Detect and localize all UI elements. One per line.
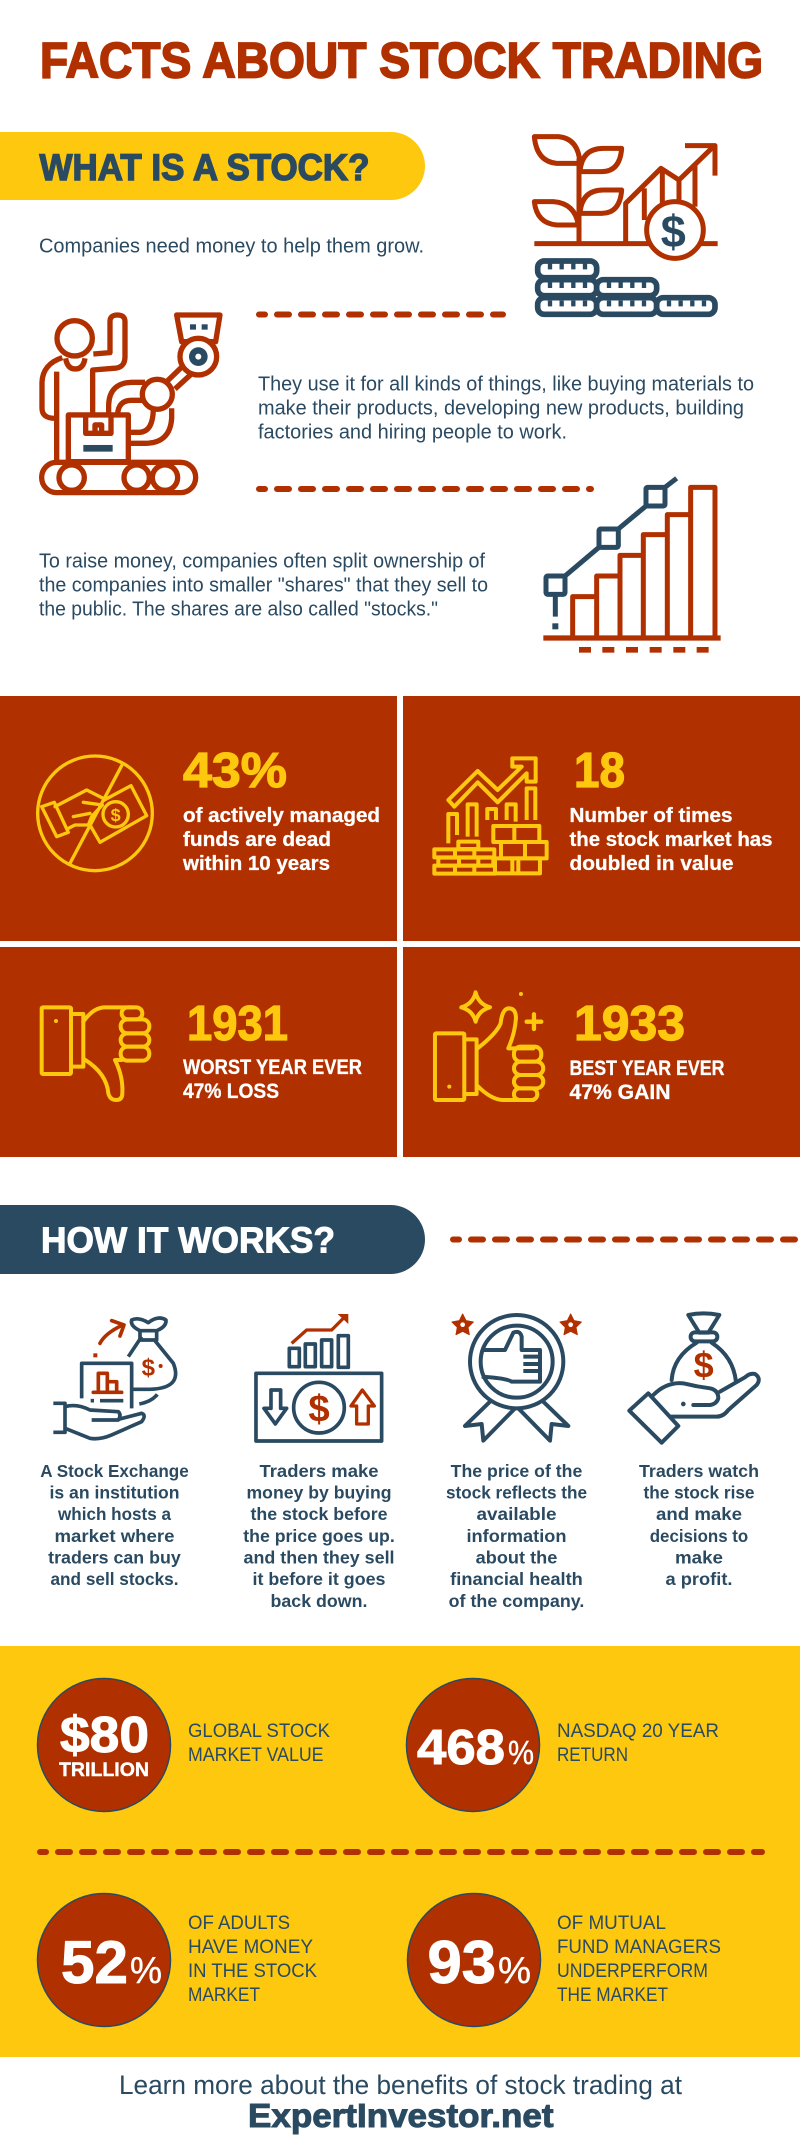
divider: dashed line one [259,312,503,318]
step 3: price reflects information: stock reflects the [446,1483,587,1503]
stat: adults with money in stocks: OF ADULTS [188,1912,290,1934]
icon: hand holding money bag: $ [694,1345,714,1386]
panel: 18 doublings: Number of times [570,805,732,827]
step 2: traders buy and sell: the stock before [250,1504,388,1524]
icon: thumbs down [42,1007,149,1100]
text: what companies use money for: factories and hiring people to work. [258,422,567,444]
icon: rosette with thumbs up and stars [452,1314,581,1441]
step 2: traders buy and sell: Traders make [260,1461,379,1481]
text: how companies raise money [39,550,488,620]
stat: mutual fund managers: FUND MANAGERS [557,1936,721,1958]
icon: hand holding money bag [629,1313,759,1443]
panel: 1931 worst year: 1931 [187,997,288,1051]
text: how companies raise money: the companies into smaller "shares" that they sell to [39,574,488,596]
panel: 1933 best year: 47% GAIN [570,1081,670,1104]
section header: what is a stock: WHAT IS A STOCK? [40,147,370,188]
stat: global stock market value: GLOBAL STOCK [188,1720,330,1742]
step 2: traders buy and sell: and then they sell [244,1548,394,1568]
panel: 43 percent of funds: of actively managed [183,805,380,827]
title: FACTS ABOUT STOCK TRADING [40,32,763,88]
stat: adults with money in stocks: % [130,1950,162,1991]
icon: worker with robot arm on conveyor [42,315,220,493]
step 3: price reflects information: of the company. [449,1591,584,1611]
stat: nasdaq return: NASDAQ 20 YEAR [557,1720,719,1742]
step 4: traders watch and decide: make [675,1548,723,1568]
text: how companies raise money: To raise money, companies often split ownership of [39,550,485,572]
step 3: price reflects information: available [476,1504,557,1524]
stat: mutual fund managers: UNDERPERFORM [557,1960,708,1982]
step 4: traders watch and decide: a profit. [666,1569,732,1589]
panel: 18 doublings: the stock market has [570,829,772,851]
footer: ExpertInvestor.net [248,2097,554,2134]
panel: 18 doublings: 18 [574,744,625,798]
stat: mutual fund managers [408,1894,721,2026]
stat: mutual fund managers: % [498,1950,531,1991]
step 4: traders watch and decide: the stock rise [644,1483,755,1503]
footer: Learn more about the benefits of stock trading at [119,2070,682,2100]
panel: 1931 worst year [0,947,397,1157]
step 1: stock exchange [40,1318,189,1589]
step 4: traders watch and decide: Traders watch [639,1461,759,1481]
panel: 43 percent of funds: funds are dead [183,829,331,851]
stat: nasdaq return: 468 [417,1721,505,1775]
text: companies need money: Companies need money to help them grow. [39,236,424,258]
stat: adults with money in stocks: 52 [61,1929,128,1996]
panel: 1933 best year: BEST YEAR EVER [570,1057,724,1080]
stat: mutual fund managers: OF MUTUAL [557,1912,666,1934]
stat: mutual fund managers: 93 [428,1929,496,1996]
step 2: traders buy and sell: back down. [270,1591,368,1611]
step 1: stock exchange: and sell stocks. [50,1569,178,1589]
step 3: price reflects information: about the [476,1548,558,1568]
icon: plant, growth chart and coins: $ [661,206,686,257]
text: what companies use money for [258,374,754,444]
step 2: traders buy and sell [243,1314,395,1611]
step 4: traders watch and decide: decisions to [650,1526,748,1546]
step 1: stock exchange: market where [54,1526,175,1546]
panel: 1931 worst year: 47% LOSS [183,1080,279,1103]
stat: nasdaq return: RETURN [557,1744,628,1766]
divider: dashed line four [40,1849,762,1855]
icon: trading board with arrows [256,1314,382,1441]
step 2: traders buy and sell: it before it goes [252,1569,386,1589]
stat: adults with money in stocks: HAVE MONEY [188,1936,313,1958]
text: how companies raise money: the public. The shares are also called "stocks." [39,598,438,620]
icon: hand with document and money bag: $ [142,1354,155,1381]
step 2: traders buy and sell: money by buying [246,1483,392,1503]
panel: 18 doublings: doubled in value [570,853,734,875]
icon: hand with document and money bag [53,1318,176,1439]
step 1: stock exchange: A Stock Exchange [40,1461,189,1481]
text: what companies use money for: make their products, developing new products, building [258,398,744,420]
stat: adults with money in stocks: MARKET [188,1984,260,2006]
stat: mutual fund managers: THE MARKET [557,1984,668,2006]
step 3: price reflects information: financial health [450,1569,583,1589]
panel: 1933 best year [403,947,800,1157]
step 4: traders watch and decide [629,1313,759,1589]
stat: adults with money in stocks [38,1894,317,2026]
stat: global stock market value: $80 [60,1706,149,1763]
step 1: stock exchange: is an institution [50,1483,180,1503]
stat: global stock market value [38,1678,330,1812]
step 4: traders watch and decide: and make [656,1504,742,1524]
icon: forbidden money handover [38,756,152,871]
panel: 1933 best year: 1933 [574,997,685,1051]
divider: dashed line two [259,486,591,492]
panel: 43 percent of funds [0,696,397,941]
panel: market statistics band [0,1646,800,2057]
text: what companies use money for: They use it for all kinds of things, like buying materials to [258,374,754,396]
panel: 43 percent of funds: within 10 years [182,853,330,875]
icon: growth arrow over bricks [434,758,547,874]
stat: global stock market value: MARKET VALUE [188,1744,324,1766]
stat: adults with money in stocks: IN THE STOCK [188,1960,317,1982]
panel: 1931 worst year: WORST YEAR EVER [183,1056,362,1079]
step 1: stock exchange: traders can buy [48,1548,181,1568]
panel: 43 percent of funds: 43% [183,744,287,798]
step 3: price reflects information: The price of the [451,1461,583,1481]
step 1: stock exchange: which hosts a [57,1504,171,1524]
icon: thumbs up with sparkle [435,992,543,1100]
section header: what is a stock [0,132,425,200]
icon: plant, growth chart and coins [534,137,718,314]
step 3: price reflects information: information [466,1526,566,1546]
step 3: price reflects information [446,1314,587,1611]
icon: rising bar chart with line [543,478,721,653]
icon: trading board with arrows: $ [308,1387,330,1430]
panel: 18 doublings [403,696,800,941]
footer [119,2070,682,2134]
step 2: traders buy and sell: the price goes up. [243,1526,395,1546]
divider: dashed line three [453,1236,800,1242]
section header: how it works: HOW IT WORKS? [41,1220,335,1260]
stat: global stock market value: TRILLION [59,1760,149,1781]
stat: nasdaq return [406,1678,719,1812]
section header: how it works [0,1205,425,1274]
icon: forbidden money handover: $ [111,805,121,825]
stat: nasdaq return: % [508,1734,534,1771]
